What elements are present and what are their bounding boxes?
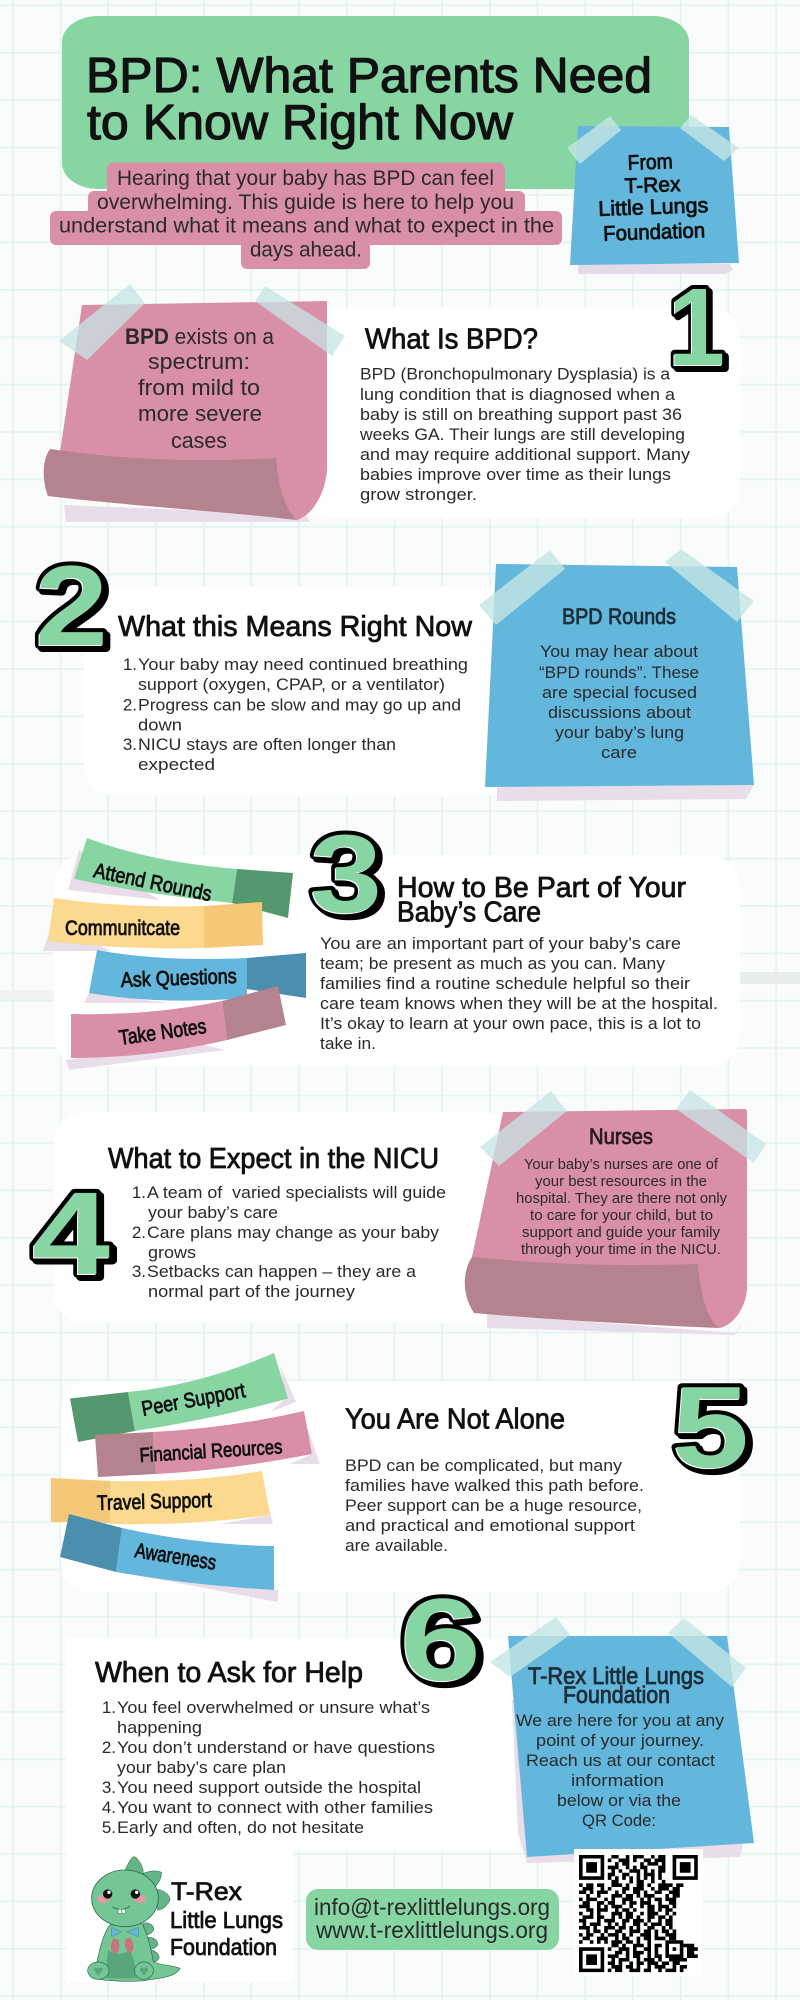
strip: attend rounds: Attend Rounds [92, 859, 214, 906]
intro text block: understand what it means and what to expect in the [59, 214, 554, 238]
list: what to expect [132, 1183, 446, 1301]
list: what this means: down [138, 716, 182, 734]
number 1: 1 [668, 266, 725, 389]
list: what to expect: A team of varied specialists will guide [147, 1183, 446, 1202]
text: how to be part: care team knows when they will be at the hospital. [320, 994, 718, 1013]
note: nurses [465, 1090, 766, 1335]
strip: peer support [70, 1353, 296, 1442]
note: BPD rounds: You may hear about [540, 642, 698, 661]
number 6: 6 [399, 1575, 480, 1706]
number 5: 5 [675, 1365, 752, 1495]
note: BPD rounds: discussions about [548, 703, 691, 722]
heading: what this means: What this Means Right Now [118, 611, 473, 643]
text: you are not alone: are available. [345, 1536, 448, 1555]
note: nurses: support and guide your family [522, 1225, 721, 1241]
note: BPD spectrum: cases [171, 428, 227, 453]
contact panel [306, 1889, 559, 1950]
note: foundation contact [490, 1617, 754, 1863]
heading: how to be part: Baby’s Care [397, 896, 541, 928]
heading: how to be part [397, 872, 686, 928]
text: you are not alone: families have walked this path before. [345, 1476, 644, 1495]
list: when to ask for help: You feel overwhelmed or unsure what’s [117, 1698, 430, 1717]
number 3: 3 [309, 813, 381, 937]
strip: travel support [51, 1471, 273, 1524]
icon: T-Rex dinosaur [88, 1857, 180, 1981]
list: when to ask for help: 2. [102, 1738, 116, 1757]
note: BPD rounds: “BPD rounds”. These [539, 663, 699, 682]
text: how to be part: team; be present as much as you can. Many [320, 954, 666, 973]
list: what this means: NICU stays are often longer than [138, 735, 396, 754]
list: what this means: support (oxygen, CPAP, or a ventilator) [138, 675, 445, 694]
text: what is BPD: and may require additional support. Many [360, 445, 691, 464]
note: from T-Rex: Little Lungs [598, 194, 709, 221]
number 2: 2 [38, 546, 111, 673]
list: when to ask for help: 1. [102, 1698, 116, 1717]
list: what this means: Progress can be slow and may go up and [138, 696, 461, 714]
note: BPD spectrum: spectrum: [148, 349, 250, 374]
panel: what this means [84, 586, 514, 796]
list: what this means: Your baby may need continued breathing [138, 655, 468, 674]
text: how to be part: You are an important part of your baby’s care [320, 934, 681, 953]
list: when to ask for help: happening [117, 1718, 202, 1737]
list: when to ask for help [102, 1698, 435, 1837]
strip: ask questions [84, 950, 306, 1003]
panel: what to expect [54, 1112, 514, 1323]
number 6: 6 [400, 1574, 481, 1705]
note: nurses: Your baby’s nurses are one of [524, 1157, 719, 1173]
strip: take notes [66, 986, 286, 1070]
strip: awareness: Awareness [133, 1539, 218, 1575]
list: when to ask for help: You want to connect with other families [117, 1798, 433, 1817]
number 6: 6 [400, 1574, 481, 1705]
panel: what is BPD [300, 308, 740, 518]
list: what this means: 3. [123, 735, 137, 754]
heading: when to ask for help: When to Ask for Help [95, 1657, 363, 1689]
list: when to ask for help: 3. [102, 1778, 116, 1797]
text: what is BPD: baby is still on breathing support past 36 [360, 405, 682, 424]
text: how to be part: take in. [320, 1034, 376, 1053]
intro text block: overwhelming. This guide is here to help you [97, 191, 514, 214]
note: BPD spectrum: from mild to [138, 375, 260, 400]
intro text block: Hearing that your baby has BPD can feel [117, 167, 494, 190]
number 3: 3 [310, 812, 382, 936]
title panel [62, 16, 689, 189]
strip: peer support: Peer Support [140, 1379, 247, 1421]
number 1: 1 [667, 267, 724, 390]
heading: how to be part: How to Be Part of Your [397, 872, 686, 904]
note: foundation contact: T-Rex Little Lungs [528, 1663, 704, 1690]
panel: when to ask for help [66, 1638, 520, 1982]
note: BPD rounds [479, 549, 754, 801]
list: what this means [123, 655, 468, 774]
note: from T-Rex: From [627, 150, 673, 175]
strip: attend rounds [68, 838, 293, 918]
note: nurses: through your time in the NICU. [521, 1242, 721, 1258]
list: what to expect: Care plans may change as your baby [147, 1223, 440, 1242]
number 3: 3 [313, 815, 385, 939]
text: what is BPD: weeks GA. Their lungs are still developing [359, 425, 685, 444]
list: when to ask for help: your baby’s care plan [117, 1758, 286, 1777]
note: BPD rounds: your baby’s lung [555, 723, 684, 742]
strip: communicate: Communitcate [65, 917, 180, 940]
strip: financial resources [95, 1411, 320, 1477]
list: what to expect: 1. [132, 1183, 146, 1202]
strip: financial resources: Financial Reources [139, 1436, 283, 1467]
title [86, 49, 652, 150]
note: foundation contact: We are here for you at any [516, 1711, 725, 1730]
title: to Know Right Now [87, 96, 514, 150]
intro text block: days ahead. [250, 238, 362, 262]
text: how to be part [320, 934, 718, 1053]
list: when to ask for help: Early and often, do not hesitate [117, 1818, 364, 1837]
list: what to expect: grows [148, 1243, 196, 1262]
note: BPD spectrum: more severe [138, 401, 262, 426]
contact panel: info@t-rexlittlelungs.org [314, 1894, 550, 1920]
text: you are not alone: Peer support can be a huge resource, [345, 1496, 642, 1515]
logo text: Foundation [170, 1934, 277, 1960]
text: what is BPD [359, 364, 691, 504]
note: nurses: hospital. They are there not only [516, 1191, 728, 1207]
note: foundation contact: Foundation [563, 1682, 670, 1709]
number 5: 5 [671, 1363, 748, 1493]
note: foundation contact: QR Code: [582, 1811, 656, 1830]
text: how to be part: families find a routine schedule helpful so their [320, 974, 690, 993]
number 5: 5 [672, 1362, 749, 1492]
note: from T-Rex: Foundation [603, 219, 706, 246]
note: BPD spectrum: BPD exists on a [125, 324, 275, 349]
number 4: 4 [31, 1169, 109, 1301]
list: when to ask for help: You don’t understand or have questions [117, 1738, 435, 1757]
note: BPD rounds: care [601, 743, 637, 762]
number 4: 4 [35, 1171, 113, 1303]
list: what to expect: 2. [132, 1223, 146, 1242]
strip: travel support: Travel Support [97, 1489, 212, 1515]
text: you are not alone: BPD can be complicated, but many [345, 1456, 623, 1475]
strip: awareness [60, 1514, 278, 1602]
number 2: 2 [34, 544, 107, 671]
number 5: 5 [672, 1362, 749, 1492]
text: what is BPD: grow stronger. [360, 485, 477, 504]
number 2: 2 [35, 543, 108, 670]
heading: what is BPD: What Is BPD? [365, 324, 538, 356]
text: you are not alone [345, 1456, 644, 1555]
text: what is BPD: babies improve over time as their lungs [360, 465, 671, 484]
strip: take notes: Take Notes [117, 1015, 208, 1050]
note: foundation contact: below or via the [557, 1791, 681, 1810]
list: what to expect: 3. [132, 1262, 146, 1281]
number 4: 4 [32, 1168, 110, 1300]
note: foundation contact: Reach us at our contact [526, 1751, 715, 1770]
list: when to ask for help: 4. [102, 1798, 116, 1817]
text: you are not alone: and practical and emotional support [345, 1516, 635, 1535]
panel: you are not alone [61, 1381, 740, 1592]
QR code [574, 1849, 703, 1976]
note: from T-Rex [567, 115, 739, 274]
strip: communicate [43, 898, 263, 951]
panel: how to be part of care [54, 855, 740, 1066]
number 2: 2 [35, 543, 108, 670]
list: when to ask for help: 5. [102, 1818, 116, 1837]
note: nurses: to care for your child, but to [530, 1208, 713, 1224]
contact panel: www.t-rexlittlelungs.org [315, 1917, 548, 1943]
number 1: 1 [671, 269, 728, 392]
text: what is BPD: lung condition that is diagnosed when a [360, 385, 676, 404]
list: what to expect: Setbacks can happen – they are a [147, 1262, 417, 1281]
logo text: Little Lungs [170, 1907, 283, 1933]
note: from T-Rex: T-Rex [624, 173, 681, 198]
note: BPD spectrum [44, 284, 345, 522]
note: nurses: Nurses [589, 1124, 653, 1149]
logo text [170, 1878, 283, 1960]
title: BPD: What Parents Need [86, 49, 652, 103]
number 6: 6 [403, 1577, 484, 1708]
note: nurses: your best resources in the [535, 1174, 707, 1190]
note: BPD rounds: are special focused [542, 683, 697, 702]
heading: what to expect: What to Expect in the NICU [108, 1143, 439, 1175]
heading: you are not alone: You Are Not Alone [345, 1404, 565, 1436]
intro text block [50, 162, 562, 269]
list: what this means: expected [138, 755, 215, 774]
list: what to expect: your baby’s care [148, 1203, 278, 1222]
strip: ask questions: Ask Questions [120, 965, 237, 992]
note: foundation contact: information [571, 1771, 664, 1790]
logo text: T-Rex [171, 1878, 243, 1906]
note: foundation contact: point of your journey. [536, 1731, 704, 1750]
text: how to be part: It’s okay to learn at your own pace, this is a lot to [320, 1014, 701, 1033]
list: what this means: 1. [123, 655, 137, 674]
number 3: 3 [310, 812, 382, 936]
list: what this means: 2. [123, 696, 137, 714]
number 4: 4 [32, 1168, 110, 1300]
note: BPD rounds: BPD Rounds [562, 604, 676, 629]
number 1: 1 [668, 266, 725, 389]
text: what is BPD: BPD (Bronchopulmonary Dysplasia) is a [360, 364, 671, 384]
list: when to ask for help: You need support outside the hospital [117, 1778, 421, 1797]
list: what to expect: normal part of the journey [148, 1282, 356, 1301]
